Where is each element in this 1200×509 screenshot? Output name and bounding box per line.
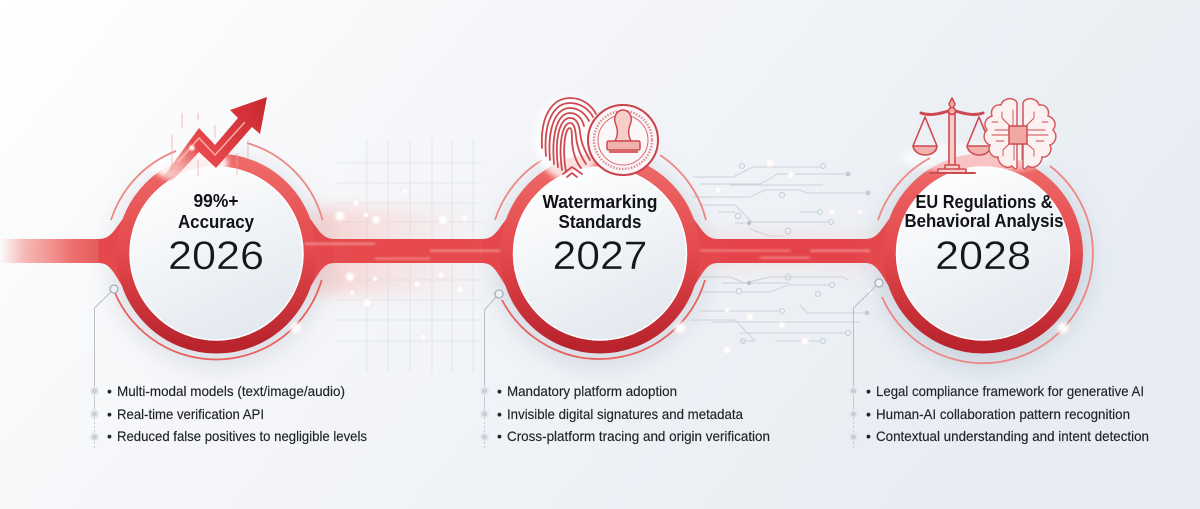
node 2027 disc bbox=[514, 167, 686, 340]
bullet list 2028: Human-AI collaboration pattern recognition bbox=[876, 406, 1130, 422]
circuit traces between 2027 and 2028 bbox=[690, 164, 870, 344]
bullet list 2027 bbox=[497, 383, 770, 444]
node 2028 heading: EU Regulations & bbox=[916, 192, 1052, 212]
node 2026 ring bbox=[98, 143, 334, 368]
node 2028 heading: Behavioral Analysis bbox=[904, 211, 1064, 231]
list markers 2027 bbox=[481, 385, 488, 450]
year 2026: 2026 bbox=[168, 234, 264, 278]
icon: fingerprint bbox=[534, 96, 602, 180]
connector 2026 bbox=[94, 285, 118, 385]
bullet list 2027: Invisible digital signatures and metadata bbox=[507, 406, 743, 422]
node 2027 heading bbox=[542, 192, 658, 232]
bullet list 2026: • bbox=[107, 383, 112, 399]
bullet list 2027: • bbox=[497, 406, 502, 422]
node 2027 heading: Standards bbox=[558, 212, 642, 232]
bullet list 2026: Multi-modal models (text/image/audio) bbox=[117, 383, 345, 399]
bullet list 2028: Contextual understanding and intent detection bbox=[876, 428, 1149, 444]
bullet list 2027: • bbox=[497, 428, 502, 444]
list markers 2026 bbox=[91, 385, 98, 450]
node 2026 disc bbox=[130, 167, 303, 340]
node 2028 disc bbox=[896, 167, 1070, 340]
bullet list 2026: Reduced false positives to negligible levels bbox=[117, 428, 367, 444]
band highlights bbox=[305, 243, 870, 259]
node 2028 ring bbox=[865, 143, 1093, 368]
bullet list 2026: Real-time verification API bbox=[117, 406, 264, 422]
node 2026 heading: 99%+ bbox=[194, 191, 238, 211]
icon: stamp bbox=[588, 105, 658, 175]
node 2026 heading: Accuracy bbox=[178, 212, 254, 232]
bullet list 2026: • bbox=[107, 406, 112, 422]
bullet list 2028 bbox=[866, 383, 1149, 444]
bullet list 2028: Legal compliance framework for generative AI bbox=[876, 383, 1144, 399]
connector 2027 bbox=[484, 290, 503, 385]
background grid left of 2027 bbox=[336, 140, 482, 372]
timeline band bbox=[0, 239, 890, 263]
node 2027 ring bbox=[482, 155, 718, 368]
list markers 2028 bbox=[850, 385, 857, 450]
bullet list 2027: Mandatory platform adoption bbox=[507, 383, 677, 399]
bullet list 2027: • bbox=[497, 383, 502, 399]
pink haze around band bbox=[312, 208, 880, 294]
icon: rising arrow bbox=[163, 97, 267, 181]
bullet list 2027: Cross-platform tracing and origin verification bbox=[507, 428, 770, 444]
bullet list 2028: • bbox=[866, 406, 871, 422]
sparkles bbox=[287, 157, 1072, 356]
icon: brain with chip bbox=[984, 99, 1056, 169]
bullet list 2028: • bbox=[866, 383, 871, 399]
icon: scales of justice bbox=[913, 98, 991, 173]
node 2027 heading: Watermarking bbox=[542, 192, 658, 212]
bullet list 2026: • bbox=[107, 428, 112, 444]
node 2026 heading bbox=[178, 191, 254, 232]
bullet list 2028: • bbox=[866, 428, 871, 444]
year 2028: 2028 bbox=[935, 234, 1031, 278]
connector 2028 bbox=[854, 279, 883, 385]
node 2028 heading bbox=[904, 192, 1064, 231]
bullet list 2026 bbox=[107, 383, 367, 444]
year 2027: 2027 bbox=[552, 234, 648, 278]
